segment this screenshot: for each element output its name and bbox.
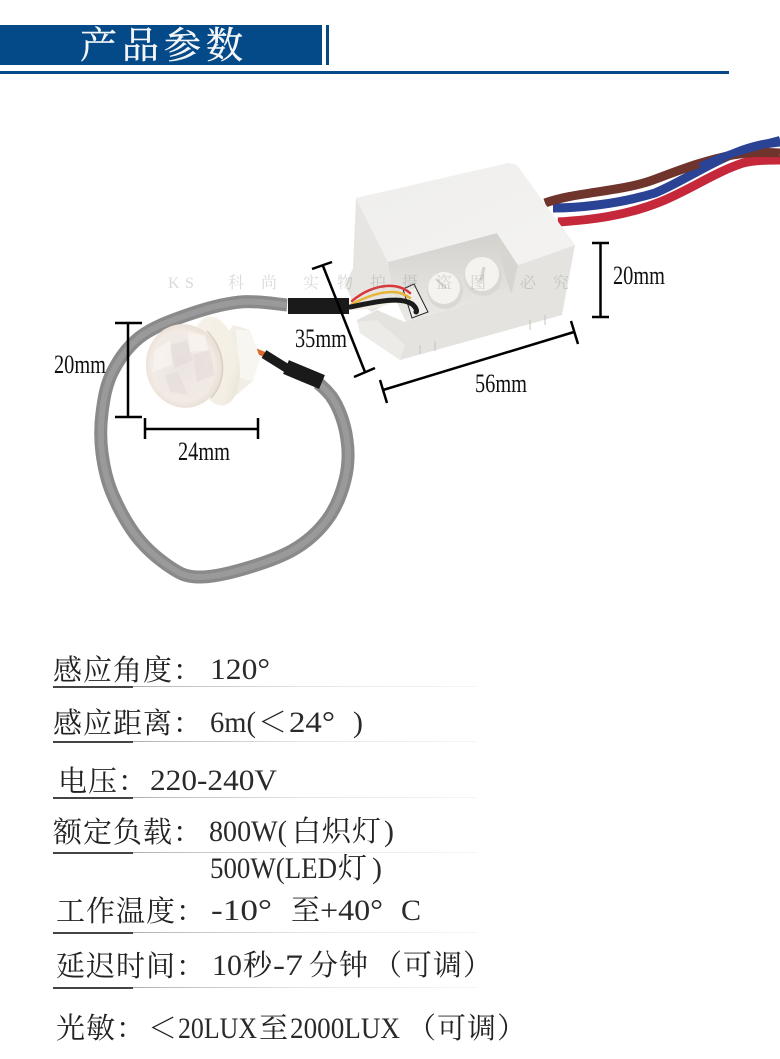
spec: rated load: 白炽灯 [292,815,382,848]
spec: rated load: 灯 [338,852,368,885]
grey sensor cable [101,302,348,577]
spec: delay time: 延迟时间： [56,950,206,983]
spec: delay time [53,949,493,989]
spec: voltage [53,764,477,799]
spec: sensing angle: 120° [210,653,270,686]
module left face [352,198,392,292]
spec: working temperature: 工作温度： [56,895,206,928]
dimension: module height 20mm: 20mm [613,261,665,290]
dimension: module width 35mm: 35mm [295,324,347,353]
PIR sensor head [139,313,322,414]
module front face [357,245,575,360]
sensor hex body [218,325,260,402]
dimension: module width 35mm [295,262,375,377]
spec: rated load: ) [384,815,394,848]
spec: sensing angle: 感应角度： [53,654,203,687]
spec: delay time: 分钟 [309,949,369,982]
spec: working temperature: -10° [211,894,272,927]
spec: light sensitivity: 2000LUX [290,1012,400,1045]
spec: sensing distance: 24° [289,706,335,739]
signal wires and heat shrink [256,351,322,382]
spec: light sensitivity: （可调） [407,1013,527,1045]
dimension: sensor length 24mm: 24mm [178,437,230,466]
spec: sensing distance: ＜ [258,707,288,739]
spec: delay time: -7 [273,949,303,982]
spec: light sensitivity: 至 [259,1013,289,1045]
module base notches [420,315,545,354]
spec: delay time: 秒 [243,949,273,982]
spec: sensing angle [53,653,477,688]
spec: voltage: 电压： [58,765,148,798]
title: 产品参数 [80,25,248,67]
spec: working temperature: C [401,894,421,927]
spec: sensing distance: 6m( [210,706,256,739]
module top face [356,163,575,265]
header banner [0,25,729,74]
spec: rated load: 额定负载： [53,816,203,849]
spec: voltage: 220-240V [150,764,277,797]
adjustment knobs [427,257,502,309]
spec: delay time: 10 [212,949,242,982]
sensor dome [139,318,229,414]
dimension: sensor length 24mm [145,418,258,466]
module recess [388,233,512,322]
heat shrink tube on module side [288,298,349,314]
spec: rated load: 800W( [209,815,287,848]
watermark: KS科尚实物拍摄盗图必究 [168,274,569,292]
spec: light sensitivity: 20LUX [178,1012,257,1045]
spec: delay time: （可调） [373,950,493,982]
sensor flange [186,313,246,409]
spec: light sensitivity: 光敏： [56,1012,146,1045]
spec: working temperature [53,894,477,934]
spec: sensing distance: 感应距离： [53,707,203,740]
wire connector [350,284,428,318]
spec: working temperature: 至 [291,895,321,927]
spec: rated load [53,815,477,885]
dimension: module length 56mm [380,321,578,403]
sensor control module [345,163,575,360]
dimension: sensor height 20mm [54,323,142,417]
dimension: module length 56mm: 56mm [475,369,527,398]
dimension: module height 20mm [592,243,665,317]
spec: working temperature: +40° [320,894,383,927]
spec: light sensitivity [56,1012,527,1045]
spec: rated load: 500W(LED [210,852,337,885]
spec: rated load: ) [372,852,382,885]
module side tab [345,262,394,312]
spec: sensing distance [53,706,477,743]
spec: light sensitivity: ＜ [148,1013,178,1045]
dimension: sensor height 20mm: 20mm [54,350,106,379]
mains wires: brown, blue, red [545,140,780,222]
spec: sensing distance: ) [353,706,363,739]
